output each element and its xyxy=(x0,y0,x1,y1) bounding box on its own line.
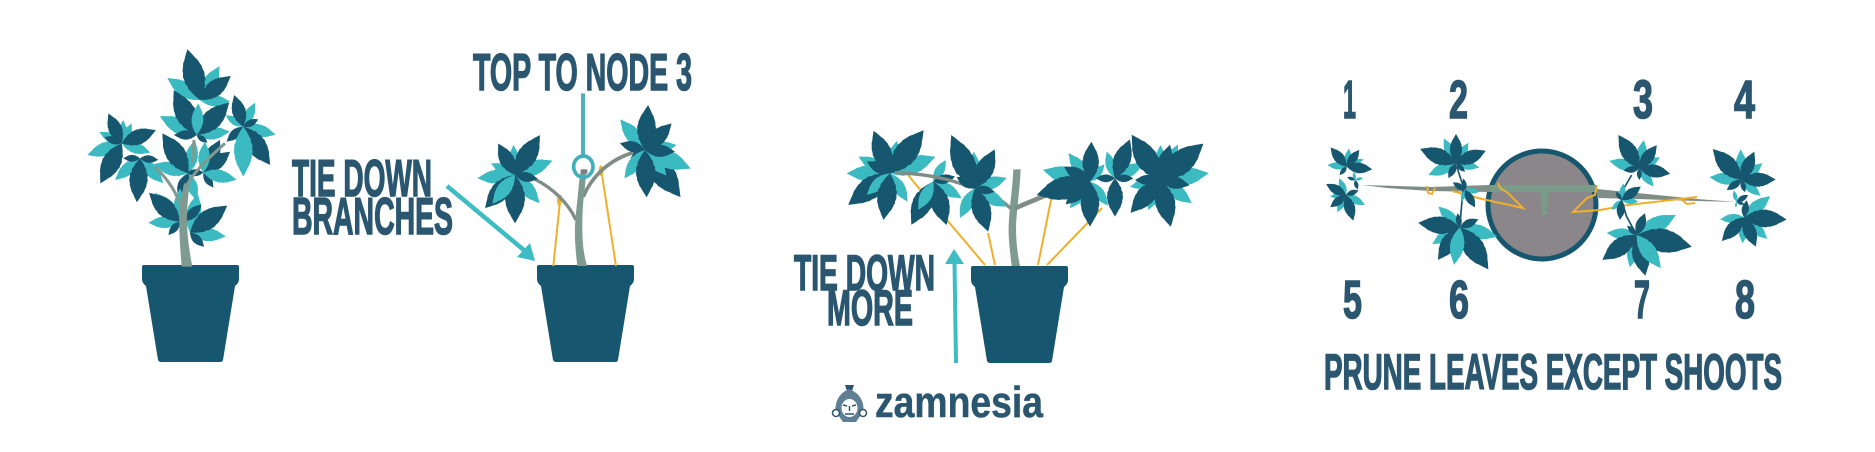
bent branch left xyxy=(895,173,1011,208)
node numbers: 5 xyxy=(1343,270,1362,330)
label: tie down more: TIE DOWN xyxy=(794,245,935,301)
node numbers: 1 xyxy=(1343,70,1356,130)
pot 1 xyxy=(142,265,239,362)
leaf 2 xyxy=(902,158,965,229)
leaf: low left xyxy=(143,186,186,237)
label: tie down branches xyxy=(292,150,453,246)
right side leaves xyxy=(1597,131,1787,278)
leaf: middle left xyxy=(152,128,202,202)
bent plant xyxy=(842,123,1211,266)
pot top circle xyxy=(1488,151,1596,259)
leaf: left lower xyxy=(111,154,168,203)
leaf 5 xyxy=(1096,136,1146,217)
right leaf xyxy=(614,104,694,205)
plant 1 foliage and stem xyxy=(85,47,278,267)
label: top to node 3: TOP TO NODE 3 xyxy=(473,44,692,102)
left side leaves xyxy=(1324,134,1499,275)
leaf 6 xyxy=(1417,202,1499,275)
arrow: to pot 2 xyxy=(447,186,535,261)
panel: tied down further plant xyxy=(842,123,1211,363)
leaf: second from top xyxy=(156,85,236,145)
pot 2 xyxy=(537,265,634,362)
leaf 7 xyxy=(1597,208,1694,278)
leaf: right xyxy=(224,93,278,177)
stem and branches xyxy=(535,152,637,266)
node numbers: 4 xyxy=(1734,70,1755,130)
stem xyxy=(1009,169,1021,266)
pot 3 xyxy=(971,266,1068,363)
topping line and ring xyxy=(574,93,593,177)
node numbers xyxy=(1343,70,1755,330)
label: tie down more xyxy=(794,245,935,336)
small shoot xyxy=(1610,183,1644,220)
leaf: far left xyxy=(85,111,159,188)
leaf 2 xyxy=(1417,134,1488,180)
leaf 1 xyxy=(1327,144,1373,177)
leaf 3 xyxy=(1608,131,1671,189)
node numbers: 7 xyxy=(1634,270,1650,330)
node numbers: 6 xyxy=(1449,270,1469,330)
leaf 1 xyxy=(842,123,939,221)
leaf: low right xyxy=(182,192,233,250)
left leaf xyxy=(477,130,555,223)
shoot stem 3 and 7 xyxy=(1620,175,1637,235)
panel: top view pruned plant xyxy=(1324,131,1787,278)
logo: zamnesia: zamnesia xyxy=(875,378,1043,427)
icon: mask xyxy=(832,385,866,422)
arrow: up beside pot 3 xyxy=(945,249,964,363)
yellow ties xyxy=(908,175,1102,265)
label: tie down branches: BRANCHES xyxy=(292,188,453,246)
leaf: top xyxy=(163,47,236,107)
node numbers: 8 xyxy=(1735,270,1755,330)
leaf 4 xyxy=(1706,143,1776,199)
main stem top view xyxy=(1362,185,1737,215)
small shoot between 1 and 5 xyxy=(1347,172,1363,190)
node numbers: 3 xyxy=(1633,70,1653,130)
yellow ties xyxy=(1427,183,1697,212)
leaf 4 xyxy=(1034,141,1113,227)
label: tie down more: MORE xyxy=(827,280,913,336)
leaf 3 xyxy=(941,130,1010,234)
yellow ties xyxy=(553,165,616,266)
leaf 5 xyxy=(1324,177,1367,222)
leaf 6 xyxy=(1122,129,1211,229)
small shoot xyxy=(1732,190,1750,208)
shoot stem 2 and 6 xyxy=(1457,167,1463,223)
plant 1 stem xyxy=(155,140,225,267)
node numbers: 2 xyxy=(1449,70,1468,130)
small shoot xyxy=(1451,178,1480,209)
panel: topped plant with ties xyxy=(477,93,694,362)
label: tie down branches: TIE DOWN xyxy=(292,150,432,208)
leaf 8 xyxy=(1717,191,1787,249)
leaf: middle right xyxy=(187,136,238,190)
panel: full plant in pot xyxy=(85,47,278,362)
bent branch right xyxy=(1015,191,1057,208)
topped plant xyxy=(477,93,694,266)
